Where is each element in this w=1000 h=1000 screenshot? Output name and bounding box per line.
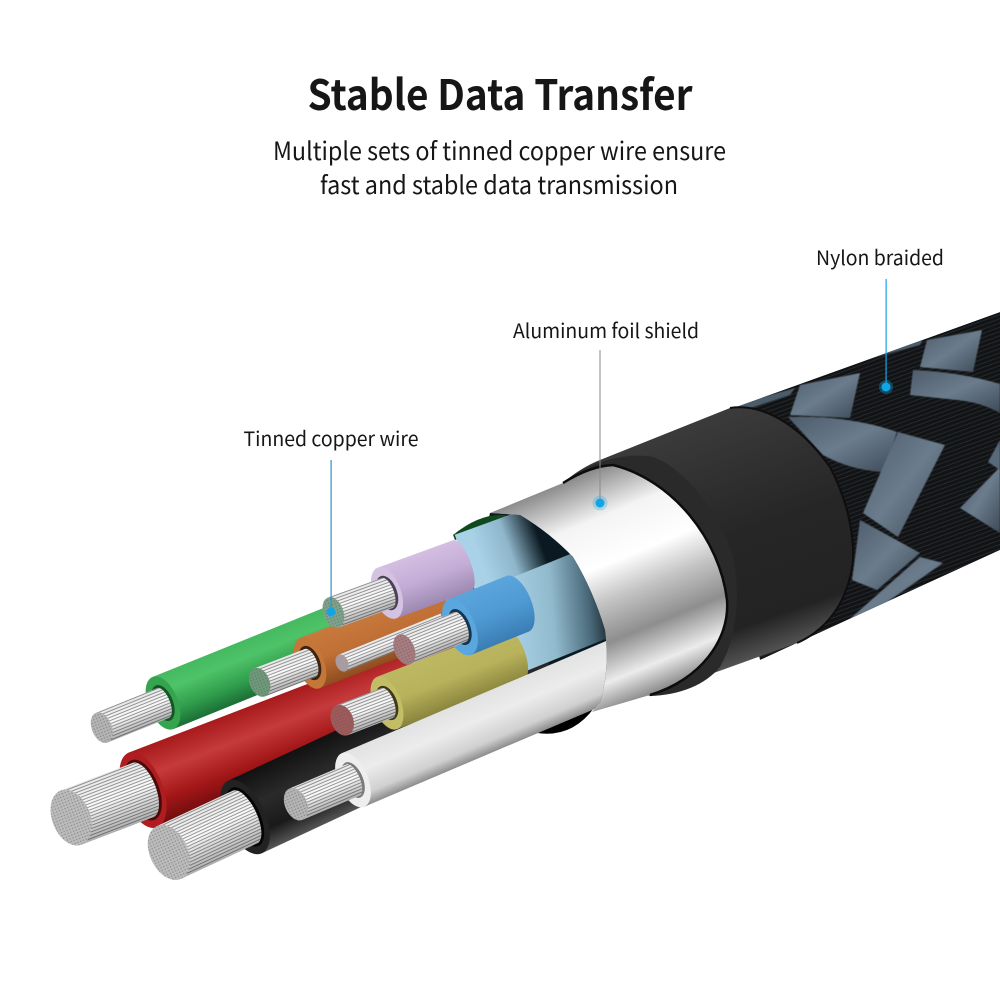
callout: nylon braided: Nylon braided — [816, 242, 944, 271]
red wire — [50, 646, 454, 846]
black wire — [148, 662, 550, 880]
orange wire — [248, 600, 447, 697]
callout: tinned copper wire: Tinned copper wire — [244, 423, 418, 452]
callout: aluminum foil shield: Aluminum foil shield — [513, 315, 699, 344]
green wire — [90, 608, 332, 743]
subtitle: fast and stable data transmission — [320, 166, 678, 202]
foil shadow — [537, 708, 594, 734]
thin centre wire — [333, 613, 447, 674]
foil opening — [470, 513, 607, 730]
white wire — [284, 641, 607, 820]
light blue inner shield front — [514, 554, 606, 670]
aluminum foil shield — [470, 465, 727, 734]
black jacket — [563, 407, 853, 696]
purple wire — [322, 540, 475, 628]
subtitle — [273, 132, 726, 202]
dark green tube — [453, 514, 507, 540]
callout: aluminum foil shield — [513, 315, 699, 510]
callout: nylon braided — [816, 242, 944, 394]
subtitle: Multiple sets of tinned copper wire ensure — [273, 132, 726, 168]
yellow wire — [330, 636, 528, 736]
internal wires — [39, 504, 640, 897]
blue wire — [393, 576, 535, 665]
callout: tinned copper wire — [244, 423, 418, 616]
title: Stable Data Transfer — [308, 62, 693, 123]
light blue inner shield top — [454, 514, 552, 589]
nylon braided section — [700, 312, 1000, 660]
